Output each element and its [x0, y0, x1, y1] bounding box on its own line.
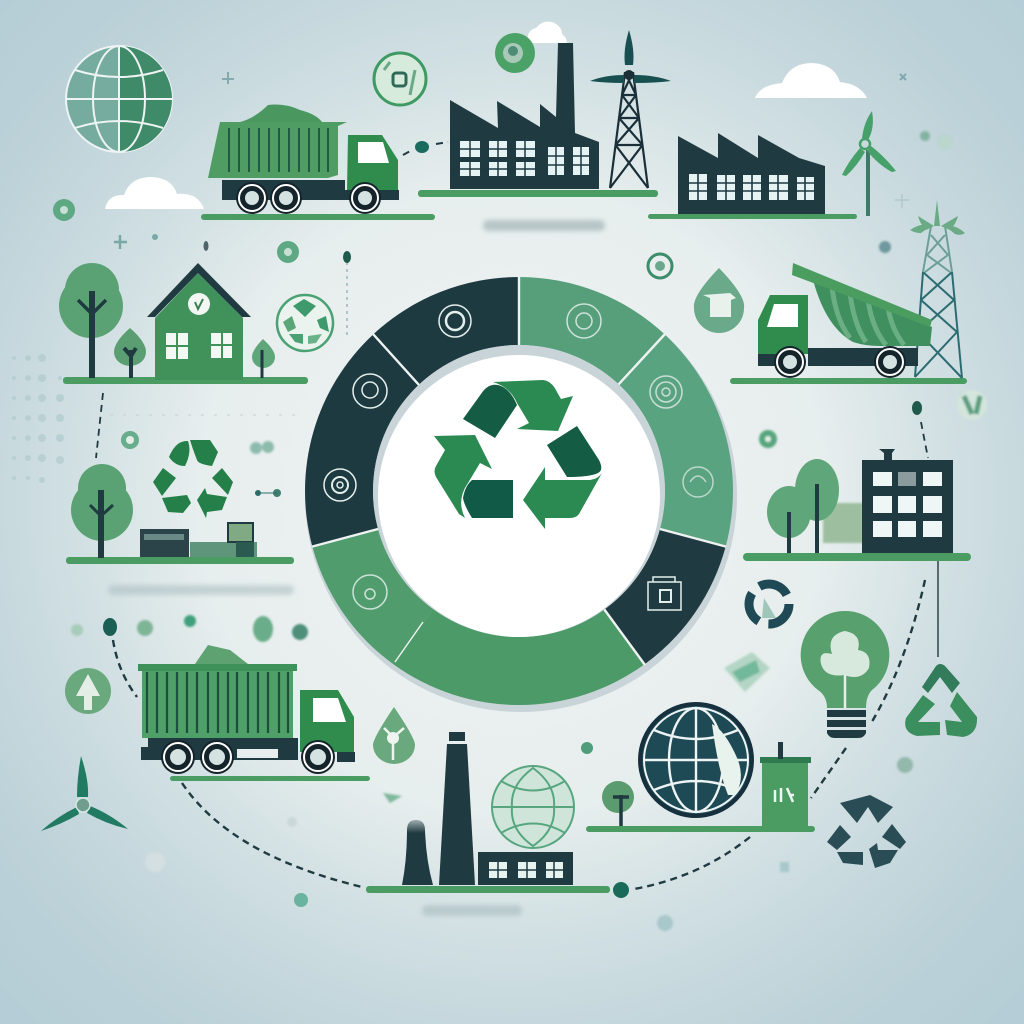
ring icons — [324, 304, 713, 610]
tree — [795, 459, 839, 553]
blurred label bottom — [422, 905, 522, 916]
ring icon 5 — [648, 577, 681, 610]
segment: green top right — [519, 277, 665, 384]
tree — [767, 486, 811, 553]
recycling icon — [153, 440, 233, 518]
segment: dark top left — [373, 277, 519, 384]
ring icon 8 — [353, 374, 387, 408]
dot — [613, 882, 629, 898]
ring icon 7 — [324, 469, 356, 501]
chimney — [439, 732, 475, 885]
centre halo — [373, 345, 665, 637]
green backdrop — [823, 503, 863, 543]
truck bottom left — [138, 645, 370, 781]
tree — [71, 464, 133, 558]
ring icon 6 — [353, 575, 387, 609]
chassis — [808, 348, 918, 366]
mark — [204, 241, 208, 251]
central donut diagram — [305, 276, 737, 712]
ground — [743, 553, 971, 561]
ground — [418, 190, 658, 197]
pylon lower lattice — [915, 272, 962, 378]
ring icon 4 — [683, 467, 713, 497]
globe top left — [66, 46, 172, 152]
dot — [657, 862, 789, 931]
dot — [343, 251, 351, 263]
dot — [957, 390, 987, 420]
ground — [63, 377, 308, 384]
ground — [66, 557, 294, 564]
blurred label left — [108, 585, 294, 595]
green dots — [53, 199, 987, 931]
building — [862, 460, 953, 553]
dump body — [208, 122, 347, 178]
segment: green lower left — [312, 529, 433, 664]
small recycling outline icon — [749, 584, 789, 624]
ring icon 1 — [439, 305, 471, 337]
wheels — [161, 740, 335, 774]
dashed connector lines — [96, 142, 938, 889]
pylon upper lattice — [923, 226, 952, 272]
wind turbine right — [842, 111, 896, 216]
dot — [103, 618, 117, 636]
icon: green badge — [495, 33, 535, 73]
load — [195, 645, 248, 664]
cab — [300, 690, 354, 752]
faint dot grid — [12, 354, 64, 483]
small building — [478, 852, 573, 885]
blurred label top — [483, 220, 605, 231]
cloud top centre — [528, 22, 567, 43]
ground — [366, 886, 610, 893]
dot — [581, 742, 593, 754]
cloud top right — [755, 63, 867, 98]
segment: green bottom — [393, 609, 645, 705]
dot — [912, 401, 922, 415]
house — [147, 263, 251, 380]
cloud left — [105, 177, 204, 209]
roof unit — [879, 449, 895, 460]
cab — [758, 295, 808, 354]
ground — [648, 214, 857, 219]
dot — [121, 431, 139, 449]
centre white disc — [378, 355, 660, 637]
chassis — [222, 180, 399, 200]
dot — [897, 757, 913, 773]
building — [450, 43, 599, 189]
segment: dark lower right — [605, 529, 726, 664]
left mid scene — [66, 440, 294, 564]
ring icon 2 — [567, 304, 601, 338]
ring icon 3 — [650, 376, 682, 408]
ground — [201, 214, 435, 220]
dot — [250, 441, 274, 454]
container — [142, 671, 293, 738]
truck top — [201, 105, 435, 220]
recycling dark bottom right — [827, 795, 906, 868]
dot — [648, 254, 672, 278]
small scattered marks top — [114, 72, 953, 253]
dot — [724, 652, 770, 692]
dump bed — [813, 280, 932, 346]
dot — [145, 793, 402, 872]
windows — [873, 472, 942, 537]
recycling badge — [277, 295, 333, 351]
segment: dark left — [305, 335, 419, 546]
pylon turbine top — [590, 30, 671, 188]
segment dividers — [312, 276, 726, 665]
tree small — [114, 328, 146, 378]
dot — [759, 430, 777, 448]
icon: small green circle — [374, 53, 426, 105]
tree small right — [252, 339, 275, 378]
power plant bottom — [366, 732, 610, 893]
mark — [222, 72, 234, 84]
tree large — [59, 263, 123, 378]
factory top — [418, 43, 658, 197]
water drop badge — [694, 268, 744, 333]
badge lower left — [65, 668, 111, 714]
dot — [53, 199, 75, 221]
pylon blades — [910, 200, 965, 235]
wheels — [774, 346, 906, 378]
recycling triangle right — [905, 664, 977, 737]
light bulb — [801, 611, 889, 738]
cooling tower — [402, 820, 433, 885]
windows — [689, 174, 814, 200]
tree — [602, 781, 634, 826]
dot — [294, 893, 308, 907]
segment: green right — [619, 335, 733, 546]
factory right — [648, 133, 857, 219]
central recycling symbol — [434, 380, 602, 529]
dot — [277, 241, 299, 263]
mark — [152, 234, 158, 240]
chassis — [141, 738, 298, 760]
ground — [170, 776, 370, 781]
windows — [460, 141, 589, 176]
bin — [760, 742, 811, 826]
load — [240, 105, 322, 122]
mark — [879, 241, 891, 253]
connector dot — [415, 141, 429, 153]
tipper truck right — [730, 200, 967, 384]
green globe — [492, 766, 574, 848]
mark — [895, 194, 909, 208]
house scene — [59, 263, 333, 384]
office building scene — [743, 449, 971, 561]
mark — [114, 235, 127, 249]
mark — [920, 131, 953, 150]
wind turbine lower left — [41, 756, 128, 831]
dot — [255, 489, 281, 497]
globe and bin scene — [586, 704, 815, 832]
wheels — [236, 182, 381, 214]
ground — [730, 378, 967, 384]
building — [678, 133, 825, 214]
ground — [586, 826, 815, 832]
dark globe — [640, 704, 752, 816]
cab — [347, 135, 398, 190]
water drop — [373, 707, 415, 764]
low factory — [140, 523, 257, 557]
mark — [900, 74, 906, 80]
dot — [71, 615, 308, 642]
